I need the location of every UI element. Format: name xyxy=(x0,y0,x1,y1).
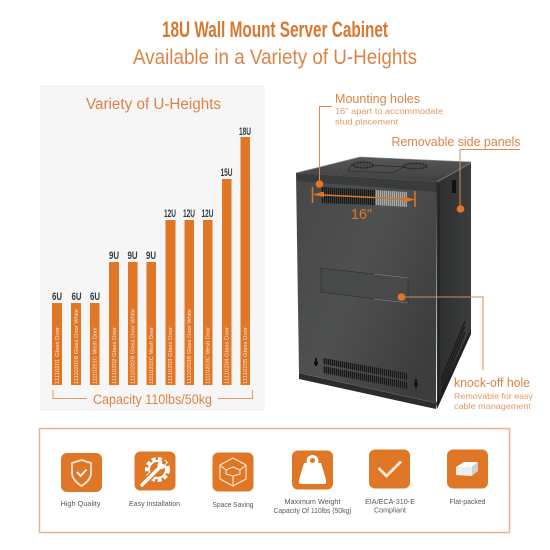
callout: knock-off hole xyxy=(398,293,534,411)
capacity label: Capacity 110lbs/50kg xyxy=(93,392,212,407)
feature: space saving: Space Saving xyxy=(212,500,254,509)
dimension arrow: 16 inch xyxy=(312,187,415,223)
bar value labels: 6U xyxy=(52,291,62,303)
bar model labels: 11110201 Glass Door xyxy=(55,327,61,384)
title: 18U Wall Mount Server Cabinet xyxy=(162,17,388,42)
cabinet side xyxy=(436,162,471,405)
feature: maximum weight: Capacity Of 110lbs (50kg) xyxy=(274,506,352,515)
top vent xyxy=(321,187,375,205)
panel: U-height bar chart xyxy=(40,85,265,411)
bar model labels: 11110202 Glass Door xyxy=(112,327,118,384)
bar value labels: 9U xyxy=(128,250,138,262)
bar value labels: 12U xyxy=(202,208,214,220)
bar value labels: 6U xyxy=(72,291,82,303)
bar value labels: 9U xyxy=(146,250,156,262)
chart heading: Variety of U-Heights xyxy=(86,96,221,113)
callout: removable side panels: Removable side panels xyxy=(392,135,520,149)
bar model labels: 11110203 Glass Door xyxy=(168,327,174,384)
bar model labels xyxy=(55,309,249,384)
bar model labels: 11110205 Glass Door xyxy=(243,327,249,384)
feature: space saving xyxy=(212,452,254,509)
dimension arrow: 16 inch: 16" xyxy=(351,206,372,223)
bar value labels xyxy=(52,126,251,303)
cabinet top xyxy=(296,157,471,182)
bar model labels: 11110203B Glass Door White xyxy=(187,309,193,384)
feature: maximum weight: Maximum Weight xyxy=(284,497,341,506)
feature: easy installation xyxy=(129,452,180,508)
panel: features xyxy=(40,428,510,532)
bar model labels: 11110202C Mesh Door xyxy=(149,327,155,384)
bar value labels: 12U xyxy=(164,208,176,220)
subtitle: Available in a Variety of U-Heights xyxy=(133,46,417,69)
capacity bracket xyxy=(53,390,252,398)
callout: removable side panels xyxy=(392,135,520,213)
callout: knock-off hole: Removable for easy xyxy=(454,391,534,401)
callout: mounting holes: 16" apart to accommodate xyxy=(335,106,443,116)
feature: maximum weight xyxy=(274,450,352,515)
bars xyxy=(52,137,250,385)
feature: high quality: High Quality xyxy=(60,499,101,508)
feature: easy installation: Easy Installation xyxy=(129,499,180,508)
callout: mounting holes xyxy=(316,92,443,188)
knock-off plate xyxy=(321,268,408,303)
bar model labels: 11110201C Mesh Door xyxy=(92,327,98,384)
top plate and fans xyxy=(348,164,404,173)
bottom vents xyxy=(323,358,407,380)
callout: mounting holes: stud placement xyxy=(335,116,399,126)
bar model labels: 11110203C Mesh Door xyxy=(206,327,212,384)
bar value labels: 18U xyxy=(239,126,251,138)
bar value labels: 6U xyxy=(90,291,100,303)
callout: knock-off hole: cable management xyxy=(454,401,532,411)
callout: knock-off hole: knock-off hole xyxy=(454,376,530,390)
bar value labels: 12U xyxy=(183,208,195,220)
feature: EIA/ECA compliant: Compliant xyxy=(374,506,407,514)
feature: flat-packed xyxy=(447,450,488,506)
bar value labels: 9U xyxy=(109,250,119,262)
bar value labels: 15U xyxy=(220,167,233,179)
feature: EIA/ECA compliant xyxy=(365,450,415,514)
side vents xyxy=(441,321,465,392)
bar model labels: 11110204 Glass Door xyxy=(224,327,230,384)
keyhole slots xyxy=(316,358,416,388)
feature: EIA/ECA compliant: EIA/ECA-310-E xyxy=(365,497,415,506)
cabinet base xyxy=(299,373,436,409)
cabinet front xyxy=(296,173,436,403)
bar model labels: 11110201B Glass Door White xyxy=(74,309,80,384)
feature: flat-packed: Flat-packed xyxy=(450,497,486,506)
cabinet product image xyxy=(296,157,471,409)
bar model labels: 11110202B Glass Door White xyxy=(130,309,136,384)
feature: high quality xyxy=(60,453,102,508)
callout: mounting holes: Mounting holes xyxy=(335,92,420,106)
